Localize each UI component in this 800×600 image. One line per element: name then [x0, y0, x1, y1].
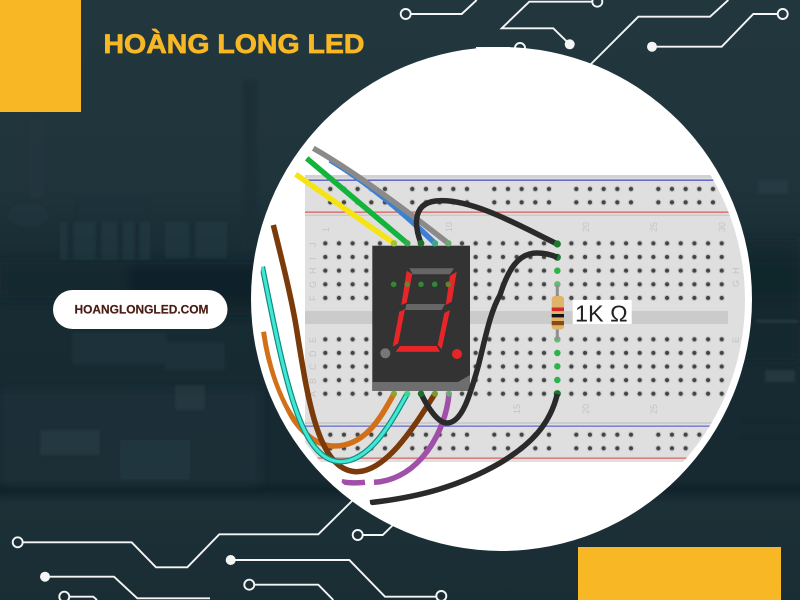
breadboard body — [305, 175, 765, 462]
breadboard body: H — [308, 268, 318, 274]
yellow corner block: top left — [0, 0, 81, 112]
title: HOÀNG LONG LED — [104, 29, 364, 59]
seven-segment display — [372, 246, 470, 391]
jumper wires: top group — [296, 148, 557, 247]
resistor column: green holes — [554, 240, 561, 397]
breadboard body: E — [308, 337, 318, 343]
resistor label: 1K Ω — [575, 300, 628, 326]
breadboard body: C — [308, 363, 318, 370]
breadboard body: J — [308, 242, 318, 247]
breadboard body: 10 — [444, 222, 454, 232]
breadboard body: 20 — [581, 222, 591, 232]
jumper wires: bottom group — [262, 225, 557, 503]
breadboard body: G — [308, 281, 318, 288]
circuit traces: top — [401, 0, 788, 65]
breadboard body: H — [731, 268, 741, 274]
breadboard body: D — [308, 350, 318, 357]
breadboard body: 15 — [512, 404, 522, 414]
white circle panel — [251, 47, 752, 551]
breadboard body: 30 — [717, 222, 727, 232]
breadboard body: 1 — [321, 227, 331, 232]
breadboard body: 25 — [649, 222, 659, 232]
breadboard body: A — [308, 391, 318, 397]
breadboard body: G — [731, 280, 741, 287]
breadboard body: B — [308, 378, 318, 384]
breadboard body: 20 — [581, 404, 591, 414]
breadboard body: 25 — [649, 404, 659, 414]
breadboard circuit illustration — [262, 148, 765, 503]
yellow block: bottom right — [578, 547, 781, 600]
resistor — [552, 285, 564, 340]
website pill: HOANGLONGLED.COM — [74, 302, 209, 316]
breadboard body: I — [308, 257, 318, 260]
circuit traces: bottom — [13, 498, 446, 600]
breadboard body: E — [731, 337, 741, 343]
breadboard body: F — [308, 295, 318, 301]
website pill — [53, 290, 228, 329]
